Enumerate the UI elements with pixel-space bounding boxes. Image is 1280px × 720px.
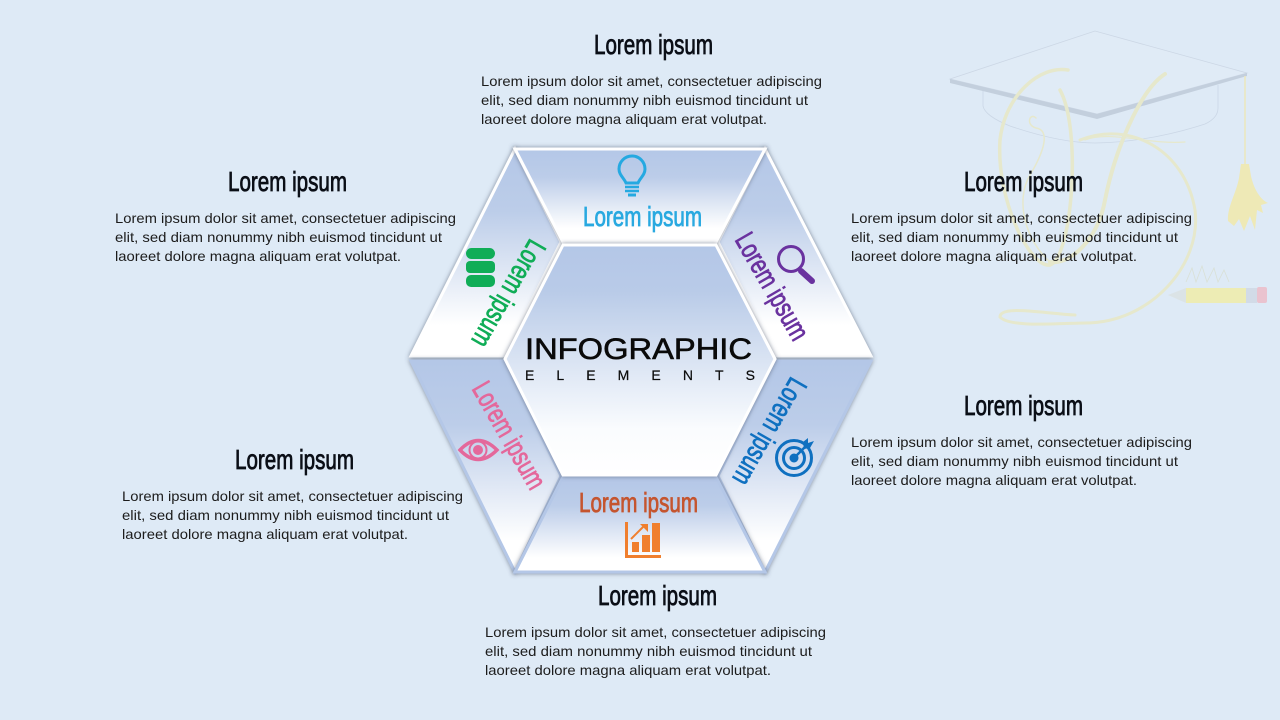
body text: Lorem ipsum dolor sit amet, consectetuer adipiscing xyxy=(851,210,1192,226)
body text: laoreet dolore magna aliquam erat volutpat. xyxy=(122,526,408,542)
icon: database xyxy=(466,248,495,287)
heading: Lorem ipsum xyxy=(235,444,354,475)
graduation cap xyxy=(950,31,1268,231)
body text xyxy=(481,73,822,127)
body text: Lorem ipsum dolor sit amet, consectetuer adipiscing xyxy=(115,210,456,226)
hexagon diagram xyxy=(411,149,871,572)
text block: upper right xyxy=(851,166,1192,264)
heading: Lorem ipsum xyxy=(964,390,1083,421)
icon: magnifier xyxy=(778,246,812,281)
body text: elit, sed diam nonummy nibh euismod tincidunt ut xyxy=(851,453,1178,469)
text block: upper left xyxy=(115,166,456,264)
watermark: graduation cap, monogram and pencil xyxy=(950,31,1268,324)
label: top segment: Lorem ipsum xyxy=(583,201,702,232)
heading: Lorem ipsum xyxy=(598,580,717,611)
segment: lower right xyxy=(718,361,871,572)
segment: top xyxy=(515,149,765,242)
label: upper right segment: Lorem ipsum xyxy=(729,227,815,346)
heading: Lorem ipsum xyxy=(594,29,713,60)
body text: laoreet dolore magna aliquam erat volutpat. xyxy=(115,248,401,264)
body text: laoreet dolore magna aliquam erat volutpat. xyxy=(481,111,767,127)
body text: Lorem ipsum dolor sit amet, consectetuer adipiscing xyxy=(122,488,463,504)
body text: elit, sed diam nonummy nibh euismod tincidunt ut xyxy=(481,92,808,108)
heading: Lorem ipsum xyxy=(964,166,1083,197)
label: lower left segment: Lorem ipsum xyxy=(466,376,552,495)
segment: bottom xyxy=(515,477,765,572)
body text: elit, sed diam nonummy nibh euismod tincidunt ut xyxy=(122,507,449,523)
body text xyxy=(851,434,1192,488)
segment: upper left xyxy=(411,149,561,356)
heading: Lorem ipsum xyxy=(228,166,347,197)
text block: lower left xyxy=(122,444,463,542)
body text: elit, sed diam nonummy nibh euismod tincidunt ut xyxy=(485,643,812,659)
segment: upper right xyxy=(718,149,871,356)
body text: Lorem ipsum dolor sit amet, consectetuer adipiscing xyxy=(481,73,822,89)
body text xyxy=(851,210,1192,264)
body text: elit, sed diam nonummy nibh euismod tincidunt ut xyxy=(115,229,442,245)
icon: light bulb xyxy=(619,156,645,195)
body text: laoreet dolore magna aliquam erat volutpat. xyxy=(851,248,1137,264)
body text xyxy=(485,624,826,678)
center subtitle: ELEMENTS xyxy=(525,367,755,383)
icon: bar chart xyxy=(625,522,661,558)
icon: eye xyxy=(460,440,497,460)
label: bottom segment: Lorem ipsum xyxy=(579,487,698,518)
segment: lower left xyxy=(411,361,561,572)
icon: target xyxy=(776,438,814,476)
body text: Lorem ipsum dolor sit amet, consectetuer adipiscing xyxy=(485,624,826,640)
center title: INFOGRAPHIC xyxy=(525,333,752,366)
label: lower right segment: Lorem ipsum xyxy=(727,373,813,491)
text block: bottom xyxy=(485,580,826,678)
body text: Lorem ipsum dolor sit amet, consectetuer adipiscing xyxy=(851,434,1192,450)
body text: laoreet dolore magna aliquam erat volutpat. xyxy=(485,662,771,678)
body text: laoreet dolore magna aliquam erat volutpat. xyxy=(851,472,1137,488)
body text: elit, sed diam nonummy nibh euismod tincidunt ut xyxy=(851,229,1178,245)
text block: lower right xyxy=(851,390,1192,488)
pencil xyxy=(1168,266,1267,303)
center hexagon xyxy=(505,245,775,475)
text block: top xyxy=(481,29,822,127)
body text xyxy=(115,210,456,264)
monogram script xyxy=(1000,69,1196,324)
body text xyxy=(122,488,463,542)
label: upper left segment: Lorem ipsum xyxy=(466,235,552,353)
